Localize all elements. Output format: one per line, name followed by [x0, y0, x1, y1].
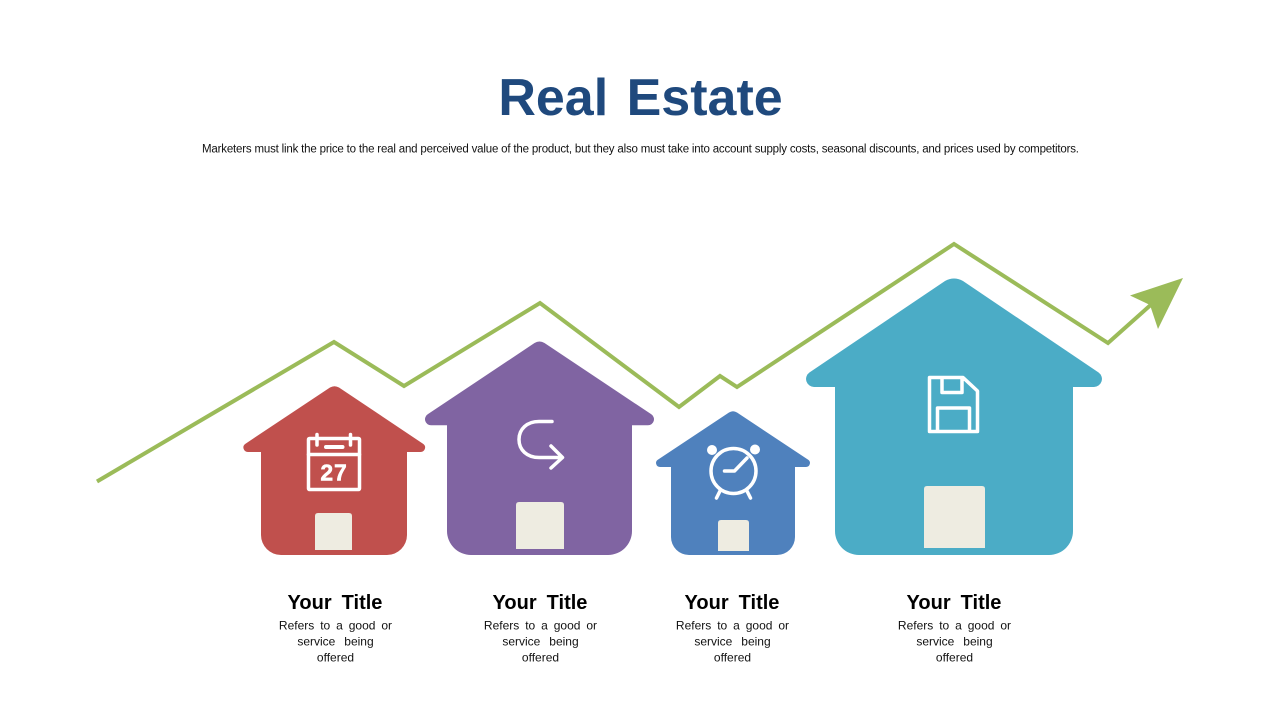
icon: floppy disk [930, 378, 978, 432]
trend line [97, 244, 1154, 482]
icon: calendar [308, 434, 360, 490]
caption body: Refers to a good or [279, 618, 392, 632]
panel: teal house [806, 278, 1102, 555]
door [718, 520, 749, 551]
caption body: service being [916, 634, 993, 648]
title: Real Estate [498, 69, 783, 127]
panel: purple house [425, 342, 654, 555]
house shape [656, 411, 810, 555]
icon: alarm clock [707, 444, 760, 498]
caption body: Refers to a good or [898, 618, 1011, 632]
house shape [243, 386, 425, 555]
caption title: Your Title [907, 592, 1001, 614]
icon: redo arrow [519, 422, 562, 468]
caption: red house [279, 592, 392, 664]
arrowhead [1130, 278, 1183, 329]
caption body: offered [522, 650, 559, 664]
growth trend arrow [97, 244, 1183, 482]
caption body: service being [694, 634, 771, 648]
caption title: Your Title [493, 592, 587, 614]
caption: blue house [676, 592, 789, 664]
caption body: Refers to a good or [676, 618, 789, 632]
subtitle text: Marketers must link the price to the real and perceived value of the product, but they also must take into account supply costs, seasonal discounts, and prices used by competitors. [202, 144, 1079, 156]
door [924, 486, 985, 548]
house shape [425, 342, 654, 555]
panel: blue house [656, 411, 810, 555]
door [315, 513, 352, 550]
caption title: Your Title [288, 592, 382, 614]
caption body [484, 618, 597, 664]
icon: calendar: 27 [320, 460, 348, 486]
caption body [676, 618, 789, 664]
caption body: offered [714, 650, 751, 664]
caption body: service being [297, 634, 374, 648]
door [516, 502, 564, 549]
caption body: offered [317, 650, 354, 664]
caption title: Your Title [685, 592, 779, 614]
caption body: service being [502, 634, 579, 648]
caption: purple house [484, 592, 597, 664]
caption: teal house [898, 592, 1011, 664]
house shape [806, 278, 1102, 555]
caption body: Refers to a good or [484, 618, 597, 632]
caption body [279, 618, 392, 664]
caption body [898, 618, 1011, 664]
panel: red house [243, 386, 425, 555]
caption body: offered [936, 650, 973, 664]
